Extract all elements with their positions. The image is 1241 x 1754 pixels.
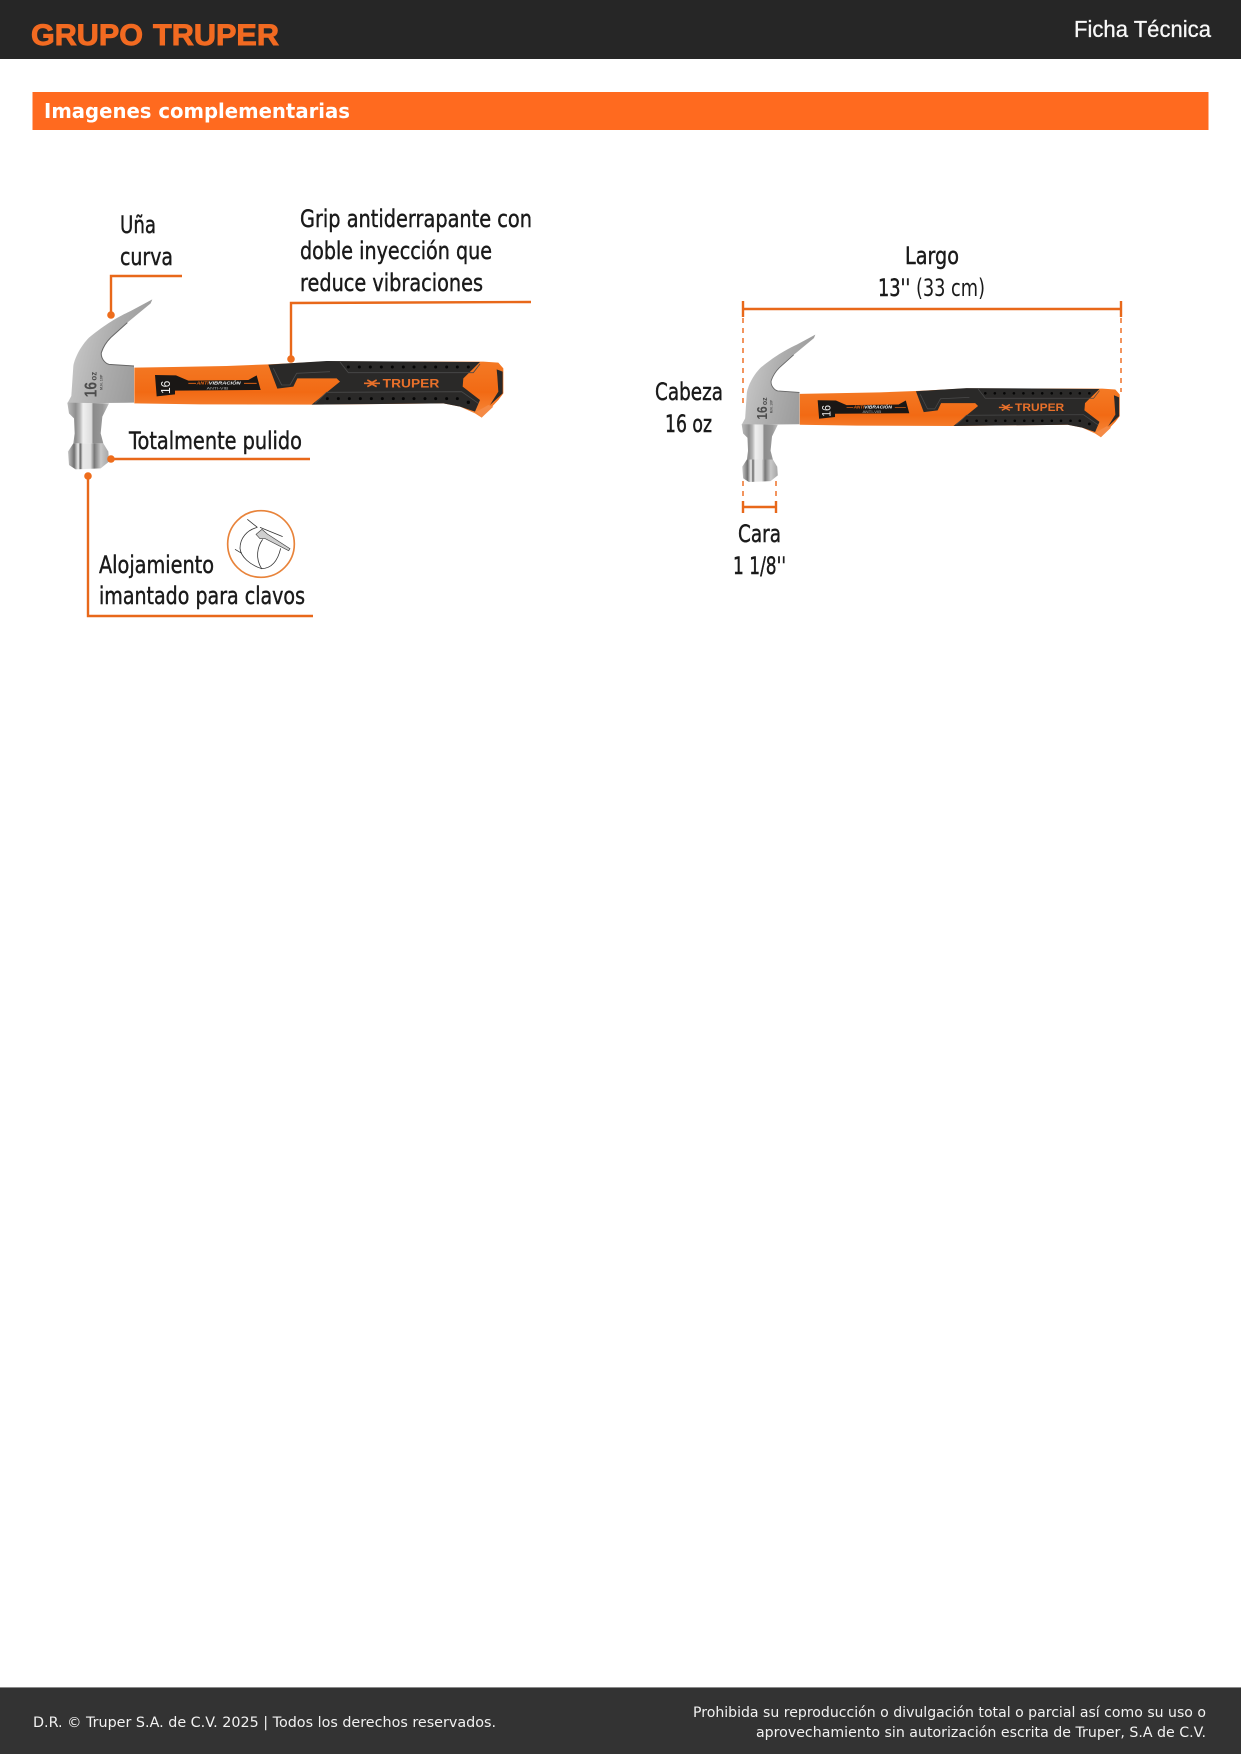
dimension: Largo: Largo [905, 242, 959, 270]
hammer illustration, features view [67, 299, 503, 469]
hammer with feature callouts [67, 205, 532, 616]
callout: Grip antiderrapante: Grip antiderrapante con [300, 205, 532, 233]
dimension: Cabeza [655, 378, 723, 438]
hammer illustration, features view: VIBRACIÓN [209, 379, 241, 386]
section heading: Imagenes complementarias [32, 92, 1208, 130]
callout: Totalmente pulido: Totalmente pulido [128, 427, 302, 455]
logo: Grupo Truper: TRUPER [153, 19, 279, 52]
header title: Ficha Técnica: Ficha Técnica [1074, 16, 1211, 42]
callout: Grip antiderrapante [287, 205, 532, 363]
callout: Uña curva [107, 211, 182, 319]
callout: Alojamiento imantado [84, 472, 313, 616]
hammer illustration, features view: oz [90, 372, 99, 381]
dimension: Largo: 13'' (33 cm) [878, 274, 985, 302]
hammer illustration, dimensions view: 16 [822, 405, 834, 417]
icon: magnetic nail holder [228, 511, 294, 577]
hammer illustration, dimensions view: ANTI-VIB [862, 410, 881, 414]
logo: Grupo Truper [31, 19, 279, 52]
logo: Grupo Truper: GRUPO [31, 19, 143, 52]
callout: Grip antiderrapante: doble inyección que [300, 237, 492, 265]
footer legal notice: Prohibida su reproducción o divulgación total o parcial así como su uso o [693, 1705, 1206, 1721]
callout: Uña curva: Uña [120, 211, 156, 239]
callout: Alojamiento imantado: Alojamiento [99, 551, 214, 579]
hammer illustration, features view: ANTI-VIB [207, 387, 229, 391]
footer bar [0, 1687, 1241, 1754]
header bar [0, 0, 1241, 59]
hammer illustration, dimensions view: TRUPER [1015, 402, 1064, 414]
callout: Grip antiderrapante: reduce vibraciones [300, 269, 483, 297]
footer legal notice [693, 1705, 1206, 1741]
hammer illustration, dimensions view: ANTI [853, 404, 865, 409]
dimension: Cabeza: Cabeza [655, 378, 723, 406]
hammer illustration, features view: TRUPER [383, 377, 439, 391]
hammer illustration, dimensions view [742, 335, 1120, 482]
dimension: Cara: Cara [738, 520, 781, 548]
callout: Alojamiento imantado: imantado para clavos [99, 582, 305, 610]
hammer illustration, features view: ANTI [196, 380, 209, 386]
dimension: Cara: 1 1/8'' [733, 552, 786, 580]
callout: Totalmente pulido [107, 427, 310, 463]
section heading: Imagenes complementarias: Imagenes complementarias [44, 99, 350, 123]
dimension: Cabeza: 16 oz [665, 410, 712, 438]
hammer illustration, dimensions view: VIBRACIÓN [864, 404, 893, 409]
hammer illustration, features view: M.N. 16P [99, 374, 104, 390]
hammer illustration, dimensions view: 16 [754, 406, 771, 420]
hammer illustration, dimensions view: oz [762, 397, 769, 405]
dimension: Largo [743, 242, 1121, 403]
callout: Uña curva: curva [120, 243, 173, 271]
hammer illustration, features view: 16 [158, 381, 173, 394]
footer copyright: D.R. © Truper S.A. de C.V. 2025 | Todos los derechos reservados. [33, 1715, 496, 1731]
hammer illustration, dimensions view: M.N. 16P [769, 399, 773, 413]
hammer with dimensions [655, 242, 1121, 580]
footer legal notice: aprovechamiento sin autorización escrita de Truper, S.A de C.V. [756, 1725, 1206, 1741]
hammer illustration, features view: 16 [81, 382, 101, 397]
dimension: Cara [733, 481, 786, 580]
